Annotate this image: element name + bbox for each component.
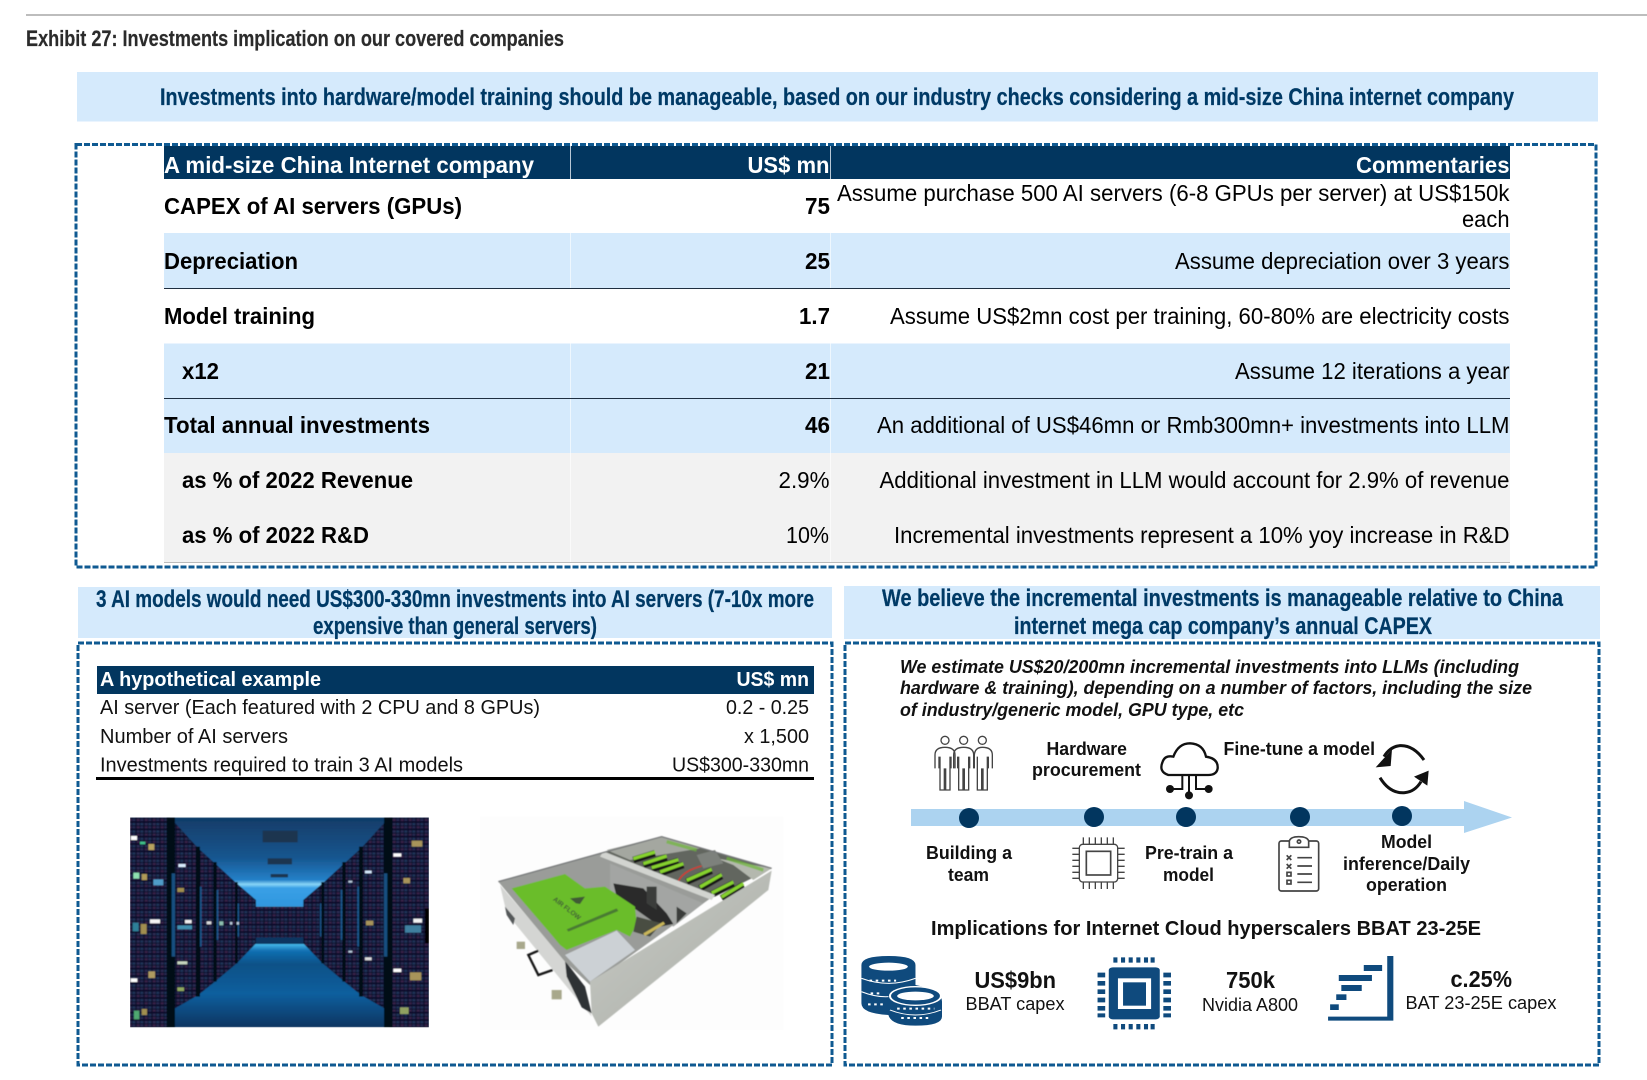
panel: LLM investment process	[845, 643, 1599, 1065]
timeline labels: operation	[1366, 875, 1447, 895]
row labels	[164, 193, 462, 548]
row values: 75	[805, 193, 830, 219]
stat: capex: US$9bn	[974, 967, 1056, 993]
timeline labels: procurement	[1032, 760, 1141, 780]
timeline labels: model	[1163, 865, 1214, 885]
timeline labels: Hardware	[1046, 739, 1127, 759]
timeline labels: team	[948, 865, 989, 885]
row labels: CAPEX of AI servers (GPUs)	[164, 193, 462, 219]
hypothetical table	[96, 666, 814, 780]
commentaries: each	[1462, 206, 1510, 232]
timeline labels: Fine-tune a model	[1224, 739, 1375, 759]
row labels: Model training	[164, 303, 315, 329]
icon: refresh cycle	[1376, 746, 1429, 793]
table header: A mid-size China Internet company	[164, 152, 534, 178]
hypothetical table: Investments required to train 3 AI models	[100, 754, 463, 776]
hypothetical table: AI server (Each featured with 2 CPU and 8 GPUs)	[100, 697, 540, 719]
row labels: x12	[182, 358, 219, 384]
icon: hardware chip outline	[1072, 837, 1125, 889]
picture: data centre aisle	[130, 817, 429, 1027]
banner: top heading	[77, 72, 1598, 122]
heading: AI models: expensive than general servers)	[313, 613, 597, 640]
timeline labels: Pre-train a	[1145, 843, 1234, 863]
row values: 2.9%	[778, 467, 830, 493]
implications heading: Implications for Internet Cloud hyperscalers BBAT 23-25E	[931, 918, 1481, 940]
row values: 1.7	[799, 303, 830, 329]
stat: capex share	[1406, 966, 1556, 1013]
row labels: Depreciation	[164, 248, 298, 274]
timeline labels: inference/Daily	[1343, 854, 1470, 874]
timeline labels: Building a	[926, 843, 1013, 863]
icon: stair chart	[1328, 956, 1393, 1021]
icon: coins	[861, 956, 942, 1026]
commentaries	[837, 180, 1510, 548]
stat: Nvidia units: Nvidia A800	[1202, 995, 1298, 1015]
commentaries: Additional investment in LLM would account for 2.9% of revenue	[880, 467, 1510, 493]
icon: team	[935, 736, 992, 790]
estimate text: hardware & training), depending on a number of factors, including the size	[900, 678, 1532, 698]
heading: manageable CAPEX: internet mega cap company’s annual CAPEX	[1014, 613, 1433, 640]
row values: 10%	[786, 522, 829, 548]
commentaries: Assume 12 iterations a year	[1235, 358, 1510, 384]
panel: implications	[861, 918, 1556, 1029]
row values: 46	[805, 412, 830, 438]
dashed frame: table	[76, 144, 1596, 567]
top rule	[26, 14, 1647, 16]
commentaries: An additional of US$46mn or Rmb300mn+ investments into LLM	[877, 412, 1510, 438]
commentaries: Assume depreciation over 3 years	[1175, 248, 1510, 274]
icon: solid chip	[1098, 957, 1171, 1029]
estimate text	[900, 657, 1532, 720]
hypothetical table: x 1,500	[744, 726, 809, 748]
panel: mid-size company table	[76, 144, 1596, 567]
commentaries: Assume US$2mn cost per training, 60-80% are electricity costs	[890, 303, 1510, 329]
timeline labels	[926, 739, 1470, 895]
icon: checklist	[1279, 837, 1319, 891]
table header: US$ mn	[748, 152, 830, 178]
stat: Nvidia units	[1202, 967, 1298, 1015]
hypothetical table: US$ mn	[736, 669, 809, 691]
timeline labels: Model	[1381, 832, 1432, 852]
hypothetical table: Number of AI servers	[100, 726, 288, 748]
row labels: Total annual investments	[164, 412, 430, 438]
row labels: as % of 2022 Revenue	[182, 467, 413, 493]
hypothetical table: 0.2 - 0.25	[726, 697, 809, 719]
hypothetical table: US$300-330mn	[672, 754, 809, 776]
stat: Nvidia units: 750k	[1226, 967, 1275, 993]
stat: capex share: BAT 23-25E capex	[1406, 993, 1556, 1013]
commentaries: Assume purchase 500 AI servers (6-8 GPUs per server) at US$150k	[837, 180, 1510, 206]
heading: AI models	[78, 586, 832, 640]
stat: capex share: c.25%	[1450, 966, 1512, 992]
picture: AI server chassis	[480, 817, 783, 1030]
heading: AI models: 3 AI models would need US$300-330mn investments into AI servers (7-10x more	[96, 586, 814, 613]
estimate text: We estimate US$20/200mn incremental investments into LLMs (including	[900, 657, 1519, 677]
icon: cloud network	[1161, 743, 1218, 799]
heading: manageable CAPEX	[844, 585, 1600, 640]
stat: capex	[966, 967, 1064, 1014]
row labels: as % of 2022 R&D	[182, 522, 369, 548]
estimate text: of industry/generic model, GPU type, etc	[900, 700, 1244, 720]
row values: 21	[805, 358, 830, 384]
stat: capex: BBAT capex	[966, 994, 1064, 1014]
hypothetical table: A hypothetical example	[100, 669, 321, 691]
table header	[164, 152, 1510, 178]
row values	[778, 193, 830, 548]
table header: Commentaries	[1356, 152, 1510, 178]
panel: hypothetical example	[78, 643, 832, 1065]
picture: AI server chassis: AIR FLOW	[551, 896, 582, 922]
commentaries: Incremental investments represent a 10% yoy increase in R&D	[894, 522, 1510, 548]
arrow: timeline	[911, 801, 1512, 833]
title: Exhibit 27: Investments implication on our covered companies	[26, 26, 564, 51]
row values: 25	[805, 248, 830, 274]
